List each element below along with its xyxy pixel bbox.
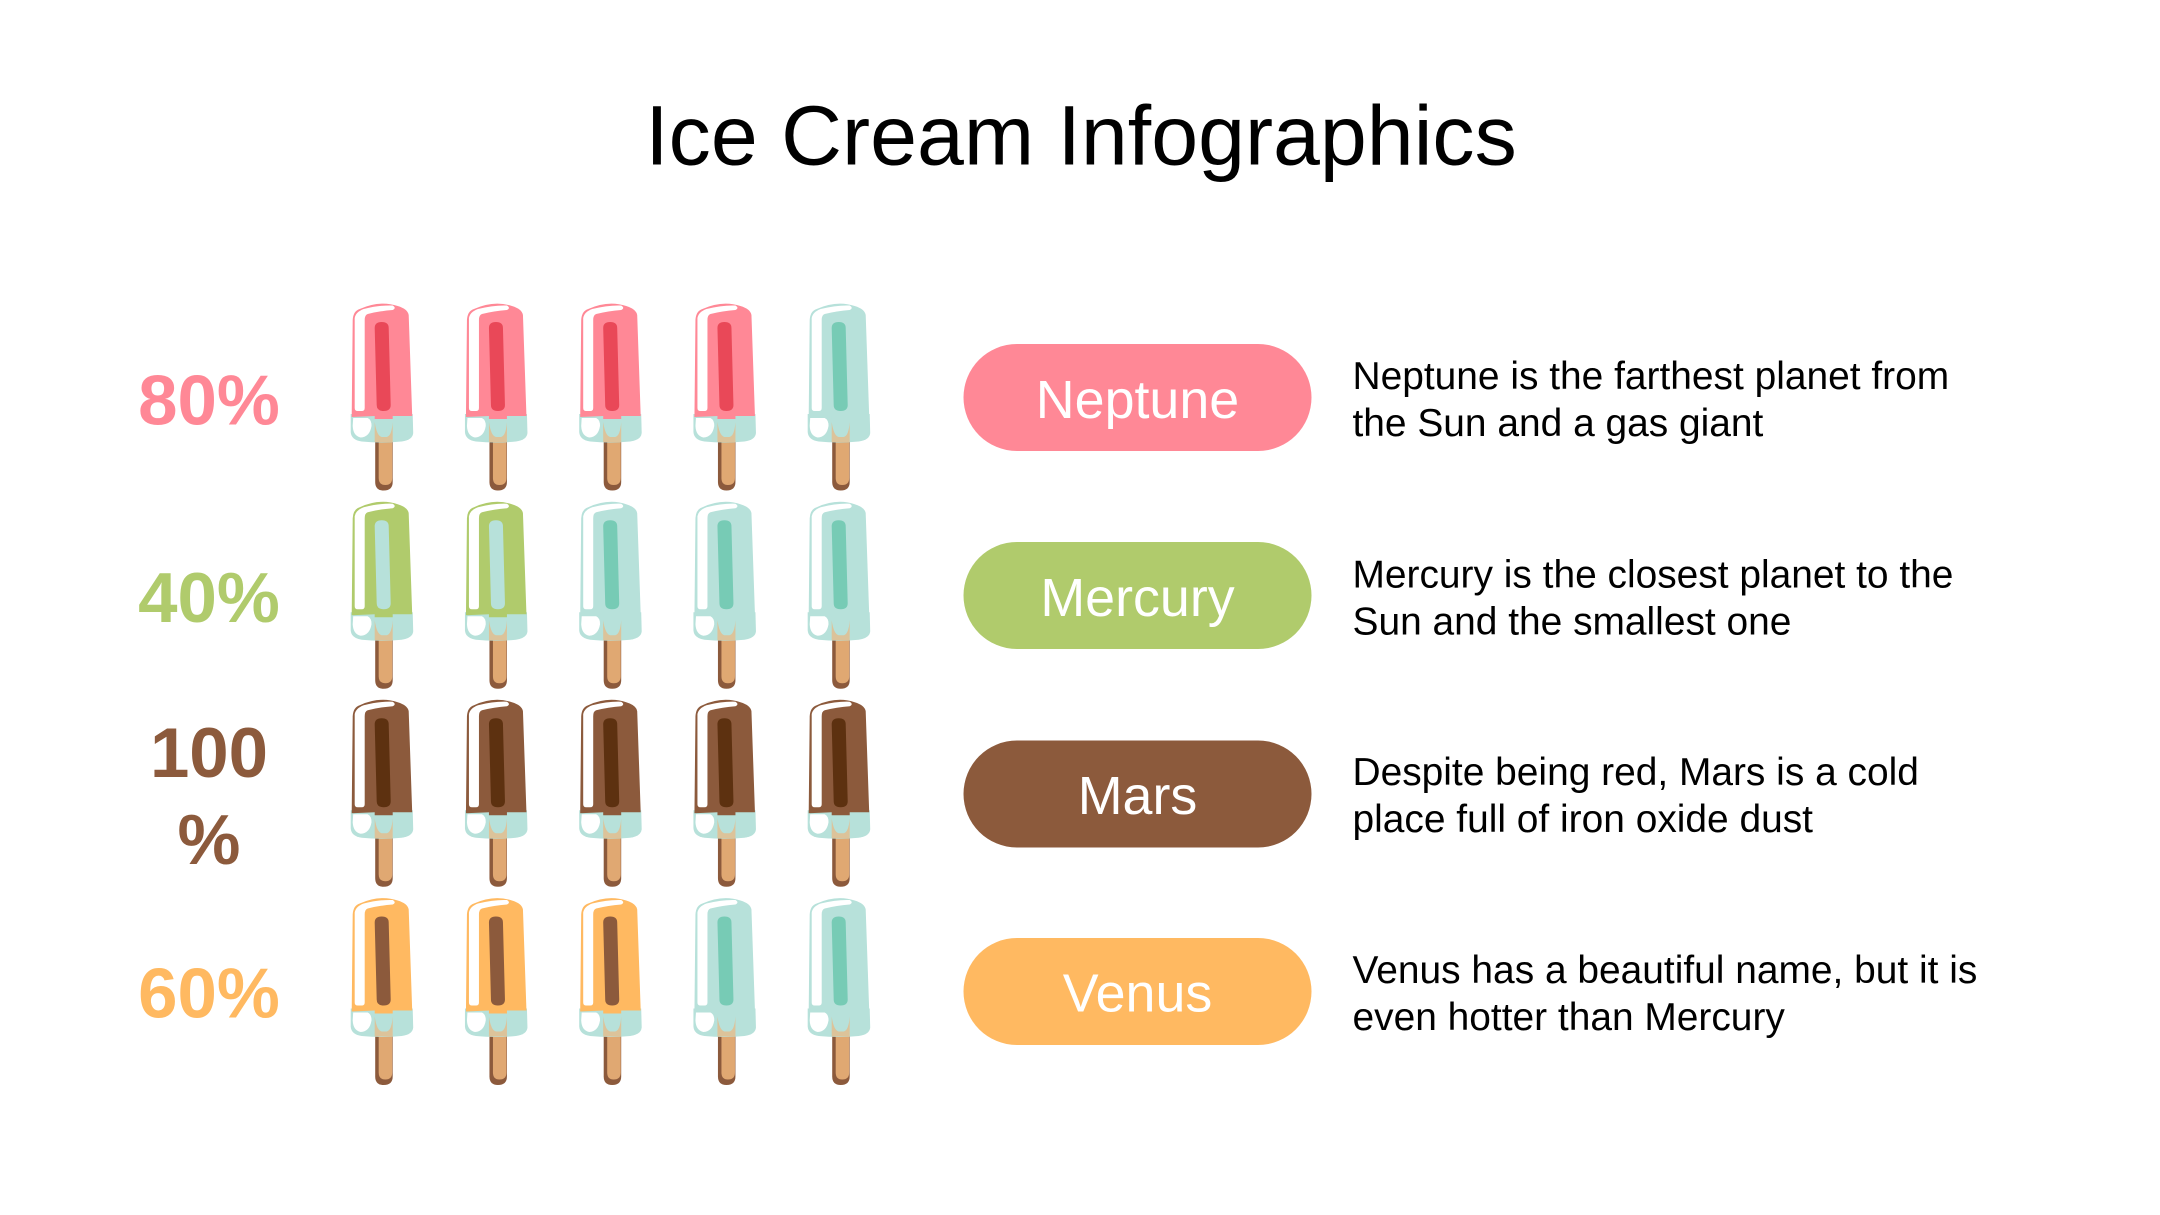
- label pill: Venus: Venus: [1063, 964, 1212, 1024]
- label pill: Mercury: [964, 542, 1312, 649]
- row: Mercury: [138, 502, 1953, 689]
- row: Neptune: [138, 304, 1949, 490]
- percentage: 100%: 100: [150, 714, 268, 793]
- title: Ice Cream Infographics: [645, 88, 1517, 182]
- percentage: 40%: 40%: [138, 559, 280, 638]
- description: Mercury: Sun and the smallest one: [1352, 600, 1791, 644]
- label pill: Mars: [964, 740, 1312, 848]
- description: Venus: even hotter than Mercury: [1352, 996, 1785, 1039]
- description: Venus: Venus has a beautiful name, but it is: [1352, 949, 1977, 992]
- label pill: Neptune: [964, 344, 1312, 451]
- popsicle pictogram: 4 of 5 filled: [351, 304, 870, 490]
- description: Mars: Despite being red, Mars is a cold: [1352, 751, 1919, 794]
- label pill: Venus: [964, 938, 1312, 1045]
- label pill: Neptune: Neptune: [1036, 370, 1239, 430]
- description: Neptune: the Sun and a gas giant: [1352, 402, 1764, 445]
- popsicle pictogram: 2 of 5 filled: [351, 502, 870, 689]
- percentage: 60%: 60%: [138, 954, 280, 1034]
- percentage: 100%: %: [178, 801, 240, 880]
- row: Venus: [138, 898, 1977, 1085]
- row: Mars: [150, 700, 1919, 887]
- description: Mars: place full of iron oxide dust: [1352, 798, 1813, 841]
- percentage: 80%: 80%: [138, 362, 280, 440]
- label pill: Mercury: Mercury: [1040, 568, 1235, 628]
- popsicle pictogram: 5 of 5 filled: [351, 700, 870, 887]
- popsicle pictogram: 3 of 5 filled: [351, 898, 870, 1085]
- description: Neptune: Neptune is the farthest planet from: [1352, 355, 1949, 398]
- label pill: Mars: Mars: [1078, 766, 1197, 826]
- description: Mercury: Mercury is the closest planet to the: [1352, 554, 1953, 596]
